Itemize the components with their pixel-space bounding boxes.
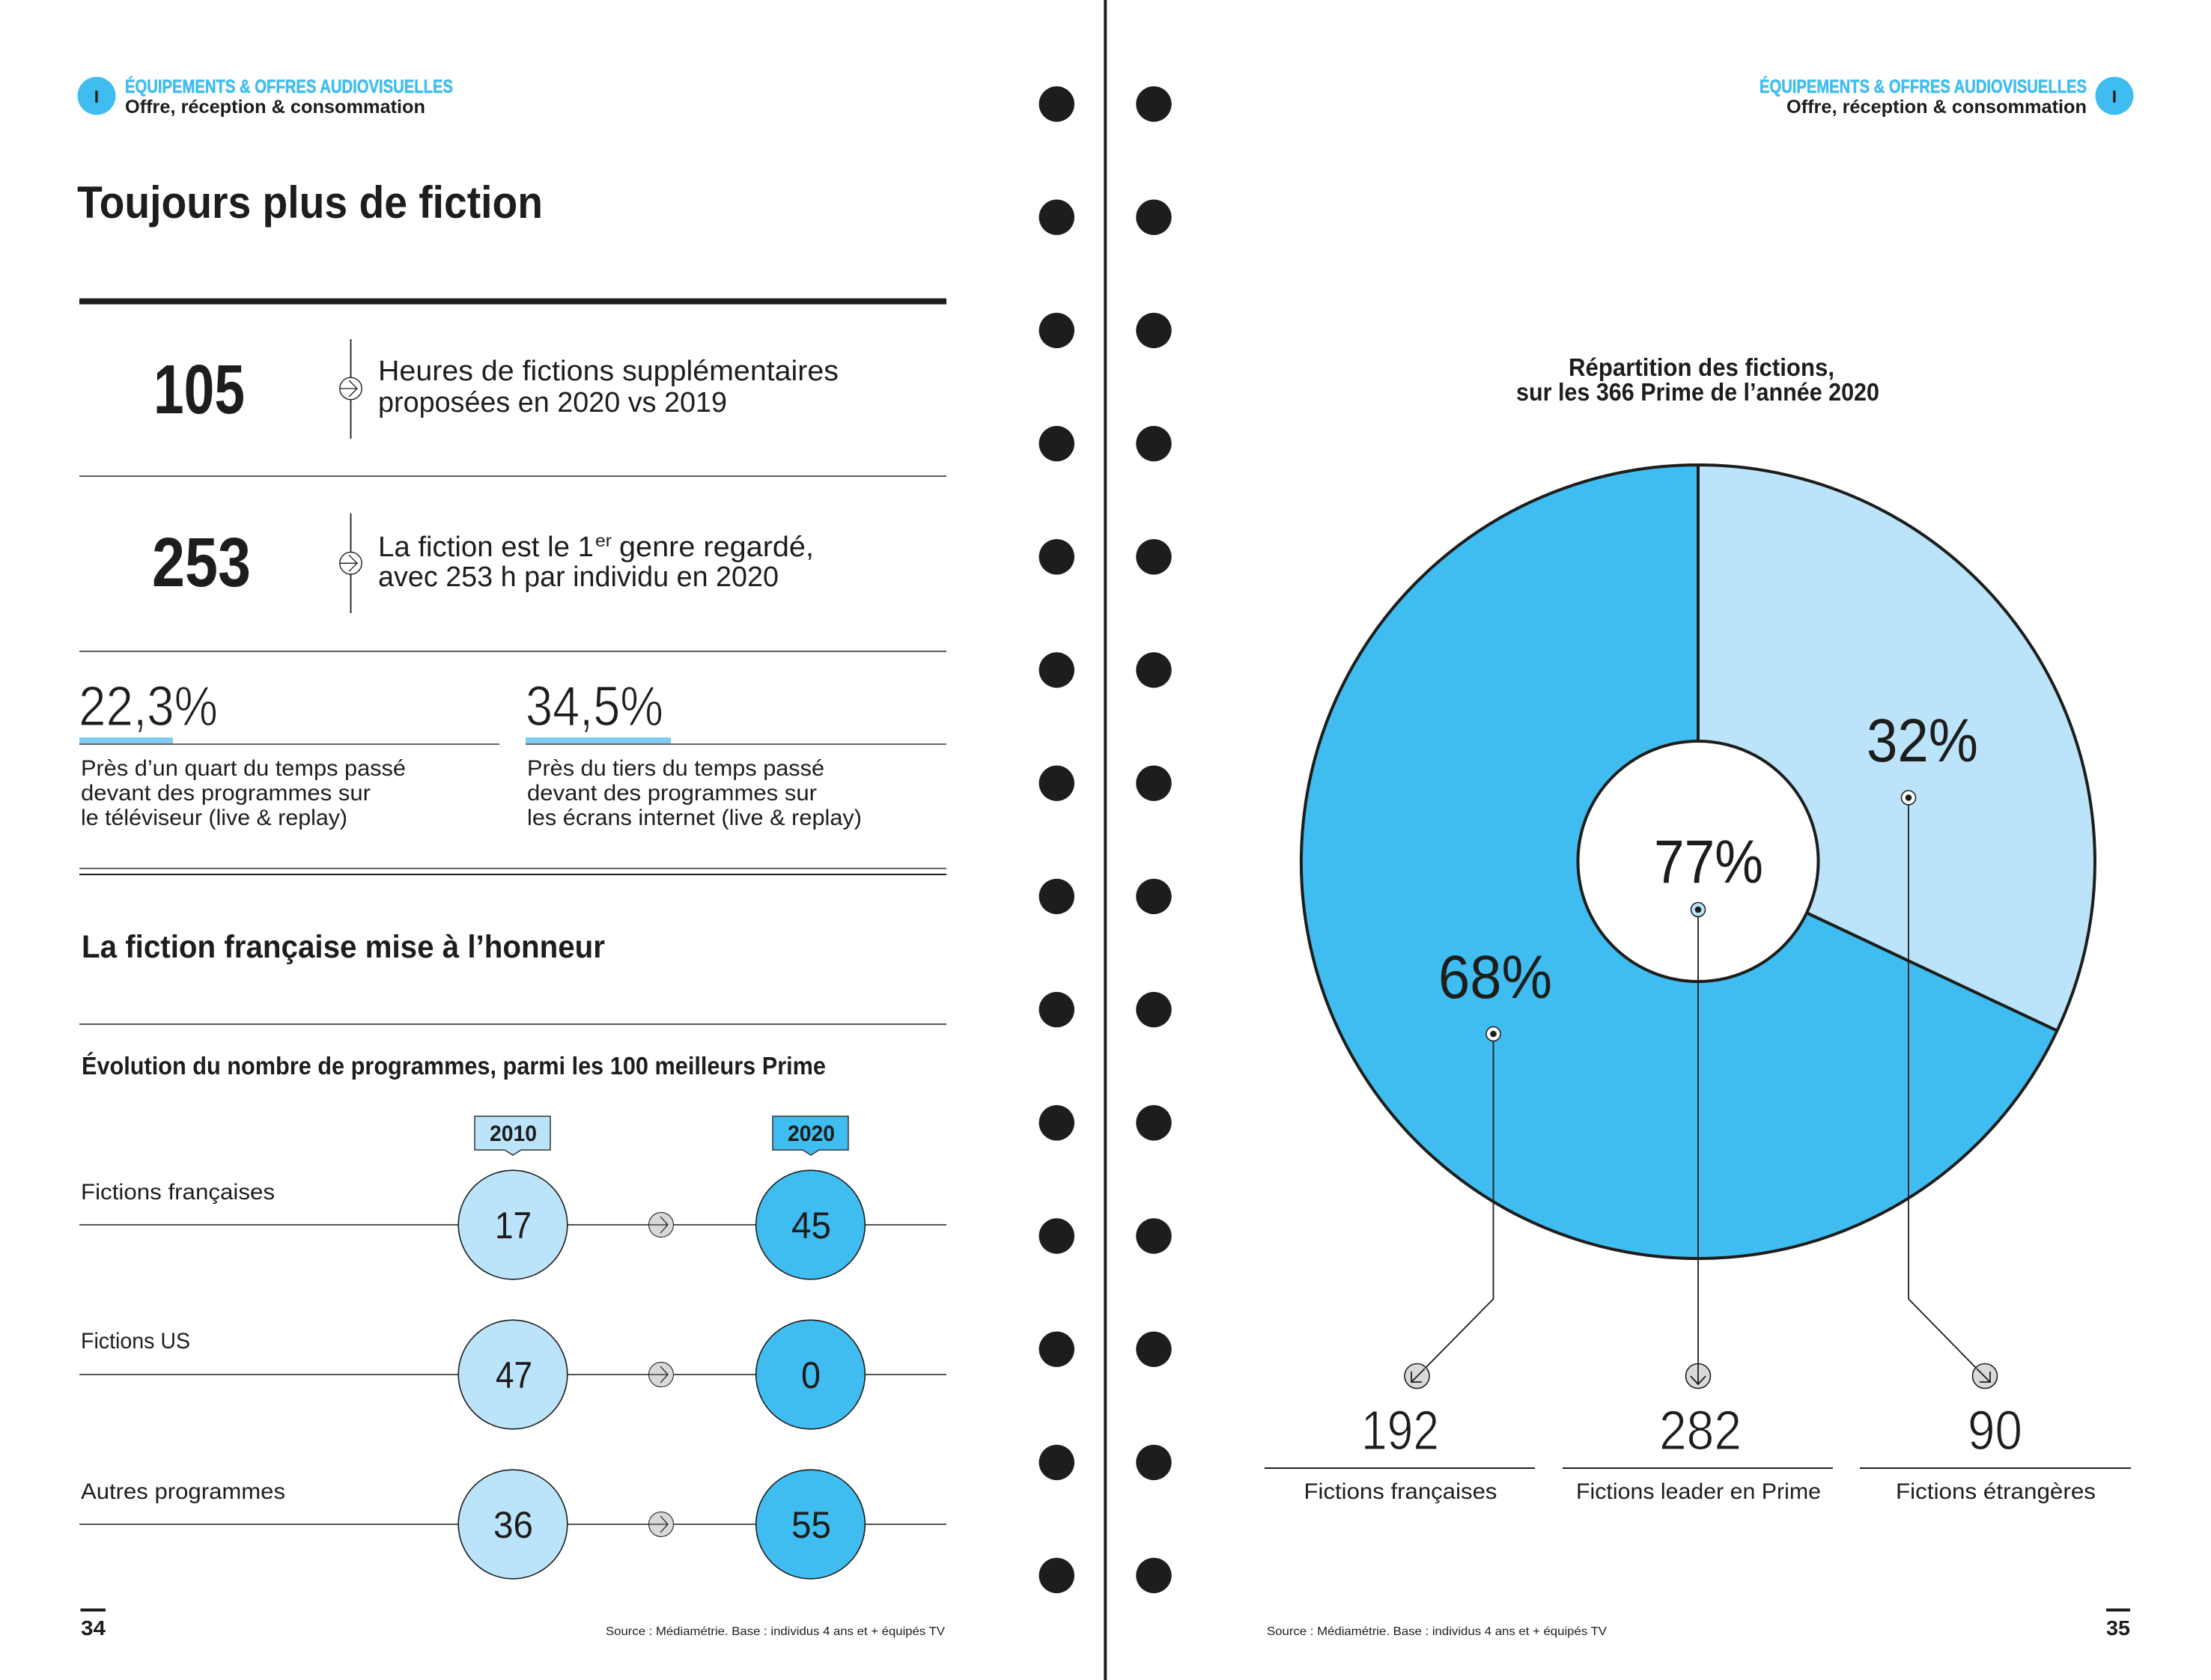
stat: 34,5%: les écrans internet (live & replay): [527, 806, 862, 830]
slice: fictions étrangères 32%: [1698, 465, 2095, 1031]
callout: fictions étrangères: [1860, 791, 2131, 1504]
page number 34: 34: [81, 1616, 106, 1640]
value 68%: 68%: [1438, 943, 1552, 1011]
panel: right page: [1265, 76, 2134, 1640]
section header right: ÉQUIPEMENTS & OFFRES AUDIOVISUELLES: [1760, 76, 2087, 97]
stat: 22,3%: Près d’un quart du temps passé: [81, 756, 406, 781]
row: Fictions US: Fictions US: [81, 1329, 190, 1354]
year tag 2020: 2020: [788, 1121, 835, 1146]
notebook spine and punched holes: [1039, 0, 1172, 1680]
callout: fictions leader en Prime: [1563, 903, 1833, 1504]
stat: 22,3%: [79, 675, 499, 830]
row: Autres programmes: 36: [493, 1504, 533, 1546]
key figure: 253: [152, 514, 814, 613]
section header left: Offre, réception & consommation: [125, 97, 425, 118]
stat: 22,3%: devant des programmes sur: [81, 781, 371, 806]
key figure: 105: Heures de fictions supplémentaires: [378, 356, 839, 387]
key figure: 253: La fiction est le 1: [378, 532, 594, 563]
row: Fictions US: [79, 1320, 946, 1429]
key figure: 253: genre regardé,: [619, 532, 814, 563]
value 77%: 77%: [1654, 828, 1763, 896]
chart heading: Évolution du nombre de programmes, parmi les 100 meilleurs Prime: [82, 1052, 826, 1080]
callout: fictions leader en Prime: Fictions leader en Prime: [1576, 1479, 1821, 1504]
stat: 22,3%: le téléviseur (live & replay): [81, 806, 347, 830]
row: Fictions US: 0: [801, 1354, 821, 1396]
stat: 34,5%: [526, 675, 946, 830]
callout: fictions françaises: 192: [1361, 1399, 1439, 1461]
chart title: Répartition des fictions,: [1569, 353, 1834, 381]
key figure: 105: proposées en 2020 vs 2019: [378, 387, 727, 419]
panel: left page: [77, 76, 946, 1640]
section header right: [1760, 76, 2134, 118]
year tag 2010: [475, 1116, 550, 1155]
pie chart: [1301, 465, 2095, 1259]
centre hole: [1578, 741, 1818, 981]
row: Fictions US: 47: [496, 1354, 532, 1396]
row: Autres programmes: 55: [791, 1504, 831, 1546]
value 32%: 32%: [1867, 707, 1978, 775]
row: Autres programmes: [79, 1470, 946, 1579]
callout: fictions étrangères: 90: [1968, 1399, 2022, 1461]
callout: fictions françaises: [1265, 1027, 1535, 1504]
slice: fictions françaises 68%: [1301, 465, 2058, 1259]
row: Fictions françaises: [79, 1170, 946, 1279]
title: Toujours plus de fiction: [77, 177, 543, 228]
thick rule: [79, 298, 946, 304]
stat: 22,3%: 22,3%: [79, 675, 218, 737]
stat: 34,5%: 34,5%: [526, 675, 663, 737]
chart title: sur les 366 Prime de l’année 2020: [1516, 378, 1879, 406]
bubble table: programmes 2010 vs 2020: [79, 1116, 946, 1579]
chart title: [1516, 353, 1879, 406]
section header right: Offre, réception & consommation: [1786, 97, 2087, 118]
row: Fictions françaises: 17: [495, 1205, 532, 1247]
callout: fictions étrangères: Fictions étrangères: [1896, 1479, 2096, 1504]
page number 34: [81, 1608, 106, 1640]
year tag 2010: 2010: [490, 1121, 537, 1146]
row: Autres programmes: Autres programmes: [81, 1479, 285, 1504]
callout: fictions françaises: Fictions françaises: [1304, 1479, 1497, 1504]
section header right: I: [2112, 87, 2117, 106]
key figure: 105: 105: [153, 350, 245, 428]
subheading: La fiction française mise à l’honneur: [82, 929, 605, 965]
section header left: ÉQUIPEMENTS & OFFRES AUDIOVISUELLES: [125, 76, 453, 97]
year tag 2020: [773, 1116, 848, 1155]
page number 35: 35: [2106, 1616, 2130, 1640]
key figure: 253: er: [595, 531, 612, 550]
stat: 34,5%: devant des programmes sur: [527, 781, 817, 806]
source note right: Source : Médiamétrie. Base : individus 4 ans et + équipés TV: [1267, 1625, 1607, 1638]
key figure: 105: [153, 339, 839, 439]
key figure: 253: avec 253 h par individu en 2020: [378, 561, 779, 593]
key figure: 253: 253: [152, 523, 251, 601]
callout: fictions leader en Prime: 282: [1659, 1399, 1742, 1461]
stat: 34,5%: Près du tiers du temps passé: [527, 756, 824, 781]
source note left: Source : Médiamétrie. Base : individus 4 ans et + équipés TV: [606, 1625, 945, 1638]
row: Fictions françaises: 45: [791, 1205, 831, 1247]
section header left: I: [94, 87, 99, 106]
section header left: [78, 76, 453, 118]
row: Fictions françaises: Fictions françaises: [81, 1180, 275, 1205]
